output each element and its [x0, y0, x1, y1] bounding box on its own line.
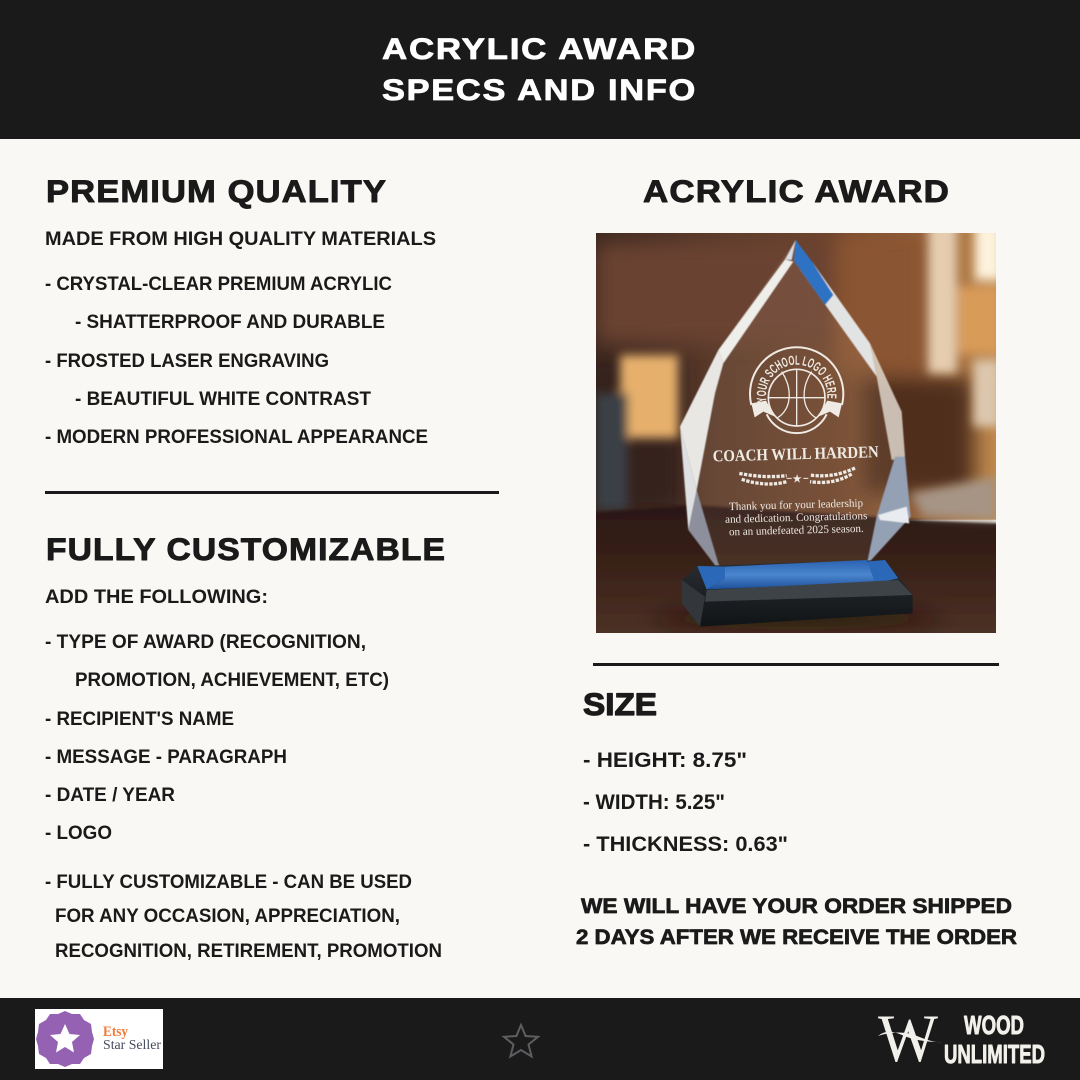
text block: customization list: RECOGNITION, RETIREMENT, PROMOTION	[55, 941, 442, 962]
badge: Etsy Star Seller: Star Seller	[103, 1038, 161, 1053]
heading: size: SIZE	[583, 686, 657, 722]
title	[382, 33, 697, 107]
text block: customization list: - MESSAGE - PARAGRAPH	[45, 747, 287, 768]
title: SPECS AND INFO	[382, 74, 697, 107]
engraving: school logo: YOUR SCHOOL LOGO HERE	[756, 356, 837, 402]
acrylic award body	[680, 240, 911, 578]
text block: customization list: - TYPE OF AWARD (RECOGNITION,	[45, 632, 366, 653]
text block: customization list	[45, 587, 442, 962]
text block: customization list: ADD THE FOLLOWING:	[45, 587, 268, 608]
text block: customization list: - FULLY CUSTOMIZABLE - CAN BE USED	[45, 872, 412, 893]
text block: premium quality list: - MODERN PROFESSIONAL APPEARANCE	[45, 427, 428, 448]
text block: premium quality list: - FROSTED LASER ENGRAVING	[45, 351, 329, 372]
text block: premium quality list: - SHATTERPROOF AND DURABLE	[75, 312, 385, 333]
header band	[0, 0, 1080, 139]
text block: premium quality list: MADE FROM HIGH QUALITY MATERIALS	[45, 229, 436, 250]
engraving: laurel divider: ★	[793, 474, 802, 485]
text block: dimensions: - WIDTH: 5.25"	[583, 790, 725, 814]
badge: Etsy Star Seller: Etsy	[103, 1024, 128, 1040]
text block: premium quality list: - BEAUTIFUL WHITE CONTRAST	[75, 389, 371, 410]
heading: premium quality: PREMIUM QUALITY	[46, 173, 387, 209]
logo: Wood Unlimited: WOOD	[964, 1010, 1024, 1040]
text block: customization list: - LOGO	[45, 823, 112, 844]
award base	[682, 560, 913, 627]
icon: purple seal with star	[36, 1011, 94, 1067]
title: ACRYLIC AWARD	[382, 33, 697, 66]
heading: fully customizable: FULLY CUSTOMIZABLE	[46, 531, 446, 567]
panel: premium quality	[45, 173, 436, 448]
text block: customization list: - DATE / YEAR	[45, 785, 175, 806]
text block: customization list: FOR ANY OCCASION, APPRECIATION,	[55, 906, 400, 927]
engraving: message: on an undefeated 2025 season.	[729, 523, 864, 538]
text block: customization list: PROMOTION, ACHIEVEMENT, ETC)	[75, 670, 389, 691]
text block: dimensions	[583, 748, 788, 856]
shipping note: 2 DAYS AFTER WE RECEIVE THE ORDER	[576, 925, 1017, 949]
icon: outline star	[504, 1025, 538, 1056]
logo: Wood Unlimited: W	[878, 1000, 939, 1076]
blurred room background	[583, 223, 1002, 520]
shipping note	[576, 894, 1017, 949]
product photo: acrylic award on desk	[596, 233, 996, 633]
text block: premium quality list: - CRYSTAL-CLEAR PREMIUM ACRYLIC	[45, 274, 392, 295]
footer band	[0, 998, 1080, 1080]
engraving: recipient name: COACH WILL HARDEN	[712, 442, 879, 466]
engraving: message: Thank you for your leadership	[729, 498, 863, 513]
wooden table	[583, 477, 1007, 647]
engraving: laurel divider	[739, 468, 855, 485]
text block: dimensions: - HEIGHT: 8.75"	[583, 748, 747, 772]
text block: premium quality list	[45, 229, 436, 448]
shipping note: WE WILL HAVE YOUR ORDER SHIPPED	[581, 894, 1012, 918]
badge: Etsy Star Seller	[35, 1009, 163, 1069]
logo: Wood Unlimited	[878, 1000, 1045, 1076]
panel: fully customizable	[45, 531, 446, 962]
heading: acrylic award: ACRYLIC AWARD	[643, 173, 950, 209]
engraving: message: and dedication. Congratulations	[725, 510, 868, 526]
engraving: school logo	[749, 346, 844, 434]
text block: dimensions: - THICKNESS: 0.63"	[583, 832, 788, 856]
panel: size	[583, 686, 788, 856]
engraving: message	[726, 499, 867, 536]
text block: customization list: - RECIPIENT'S NAME	[45, 709, 234, 730]
